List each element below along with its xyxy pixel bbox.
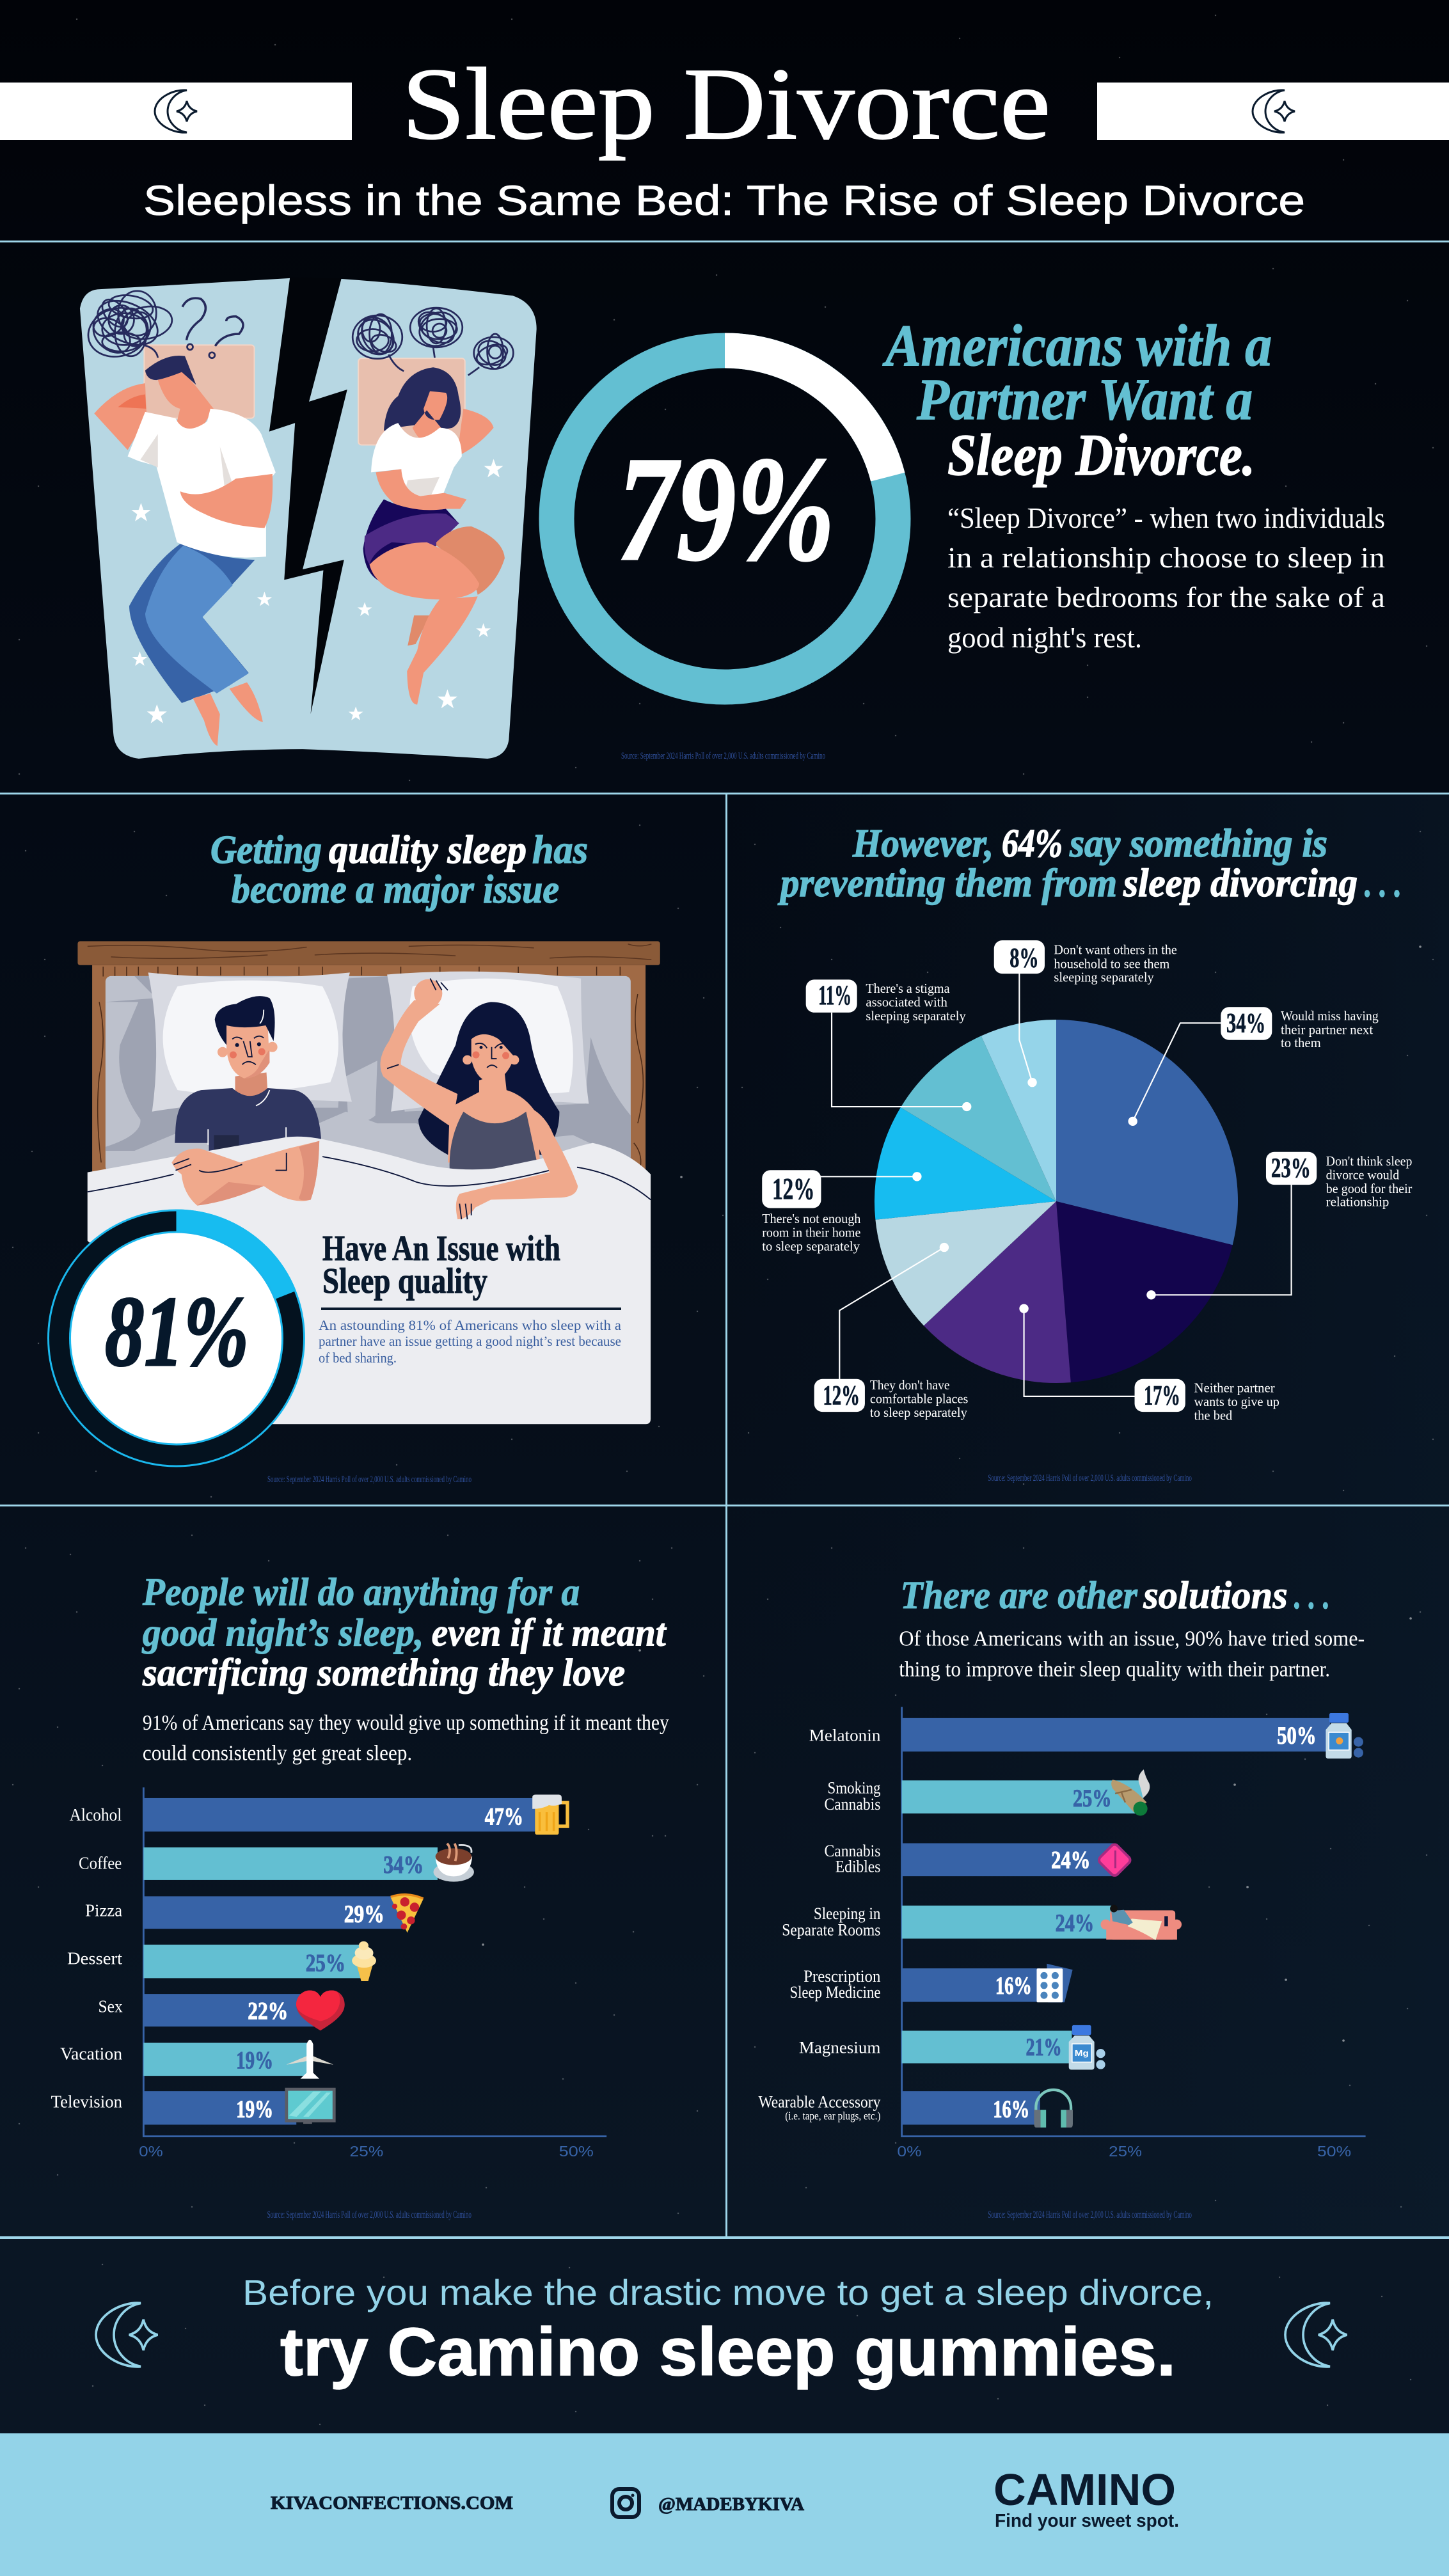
callout 12% not enough room: There's not enough — [762, 1212, 861, 1226]
callout 11% — [806, 979, 971, 1111]
callout 12% comfortable places: They don't have — [870, 1378, 950, 1393]
source note: Source: September 2024 Harris Poll of over 2,000 U.S. adults commissioned by Camino — [621, 751, 825, 761]
source note: Source: September 2024 Harris Poll of over 2,000 U.S. adults commissioned by Camino — [988, 1473, 1192, 1483]
dividers — [0, 241, 1449, 2239]
callout 34%: their partner next — [1281, 1023, 1373, 1037]
heading: preventing them from — [777, 862, 1117, 905]
axis ticks: 25% — [1109, 2143, 1142, 2160]
callout 11%: sleeping separately — [866, 1009, 966, 1023]
callout 12% comfortable places — [814, 1243, 968, 1420]
callout 17% — [1019, 1304, 1279, 1423]
icon: beer — [532, 1794, 567, 1835]
icon: prescription blister pack — [1036, 1964, 1073, 2002]
callout 17%: the bed — [1194, 1408, 1233, 1423]
axis ticks: 0% — [139, 2143, 163, 2160]
value labels: 34% — [383, 1851, 424, 1879]
woman in bed — [380, 979, 559, 1173]
callout 12% comfortable places: comfortable places — [870, 1392, 968, 1407]
callout text — [319, 1317, 621, 1366]
callout 12% not enough room: 12% — [772, 1173, 814, 1206]
callout heading — [322, 1229, 560, 1301]
heading — [777, 822, 1402, 905]
callout 17%: 17% — [1144, 1381, 1180, 1411]
panel: quality sleep issue — [49, 828, 660, 1485]
value labels: 50% — [1277, 1722, 1316, 1750]
icon: heart — [296, 1990, 345, 2030]
intro text: thing to improve their sleep quality with their partner. — [899, 1657, 1330, 1681]
callout 12% comfortable places: 12% — [823, 1381, 860, 1411]
category labels: Magnesium — [799, 2037, 881, 2057]
callout 23%: 23% — [1271, 1153, 1311, 1183]
food and item icons — [287, 1794, 567, 2124]
category labels: Sex — [98, 1996, 123, 2016]
cta line one: Before you make the drastic move to get a sleep divorce, — [242, 2272, 1214, 2312]
axis ticks — [897, 2143, 1351, 2160]
heading: sacrificing something they love — [142, 1652, 625, 1695]
value labels: 21% — [1025, 2034, 1062, 2061]
callout text: An astounding 81% of Americans who sleep with a — [319, 1317, 621, 1333]
logo: camino: CAMINO — [994, 2465, 1176, 2515]
woman sleeping — [358, 358, 505, 704]
icon: cannabis joint — [1111, 1769, 1150, 1816]
value labels: 24% — [1056, 1909, 1094, 1937]
value labels: 19% — [236, 2096, 273, 2123]
axis ticks: 25% — [349, 2143, 383, 2160]
heading: has — [532, 828, 588, 872]
callout 23%: be good for their — [1326, 1181, 1412, 1196]
callout 23%: relationship — [1326, 1195, 1389, 1210]
logo: camino: Find your sweet spot. — [995, 2511, 1179, 2531]
callout 12% not enough room: room in their home — [762, 1226, 860, 1240]
callout 8%: household to see them — [1054, 957, 1169, 972]
category labels: Pizza — [85, 1900, 122, 1920]
value labels: 19% — [236, 2046, 273, 2074]
icon: instagram — [612, 2489, 639, 2517]
man sleeping — [94, 345, 276, 746]
category labels — [51, 1805, 123, 2112]
heading: Partner Want a — [916, 367, 1253, 432]
category labels: Prescription — [804, 1966, 880, 1986]
heading: quality sleep — [329, 828, 527, 872]
heading: even if it meant — [432, 1611, 667, 1654]
value labels: 16% — [995, 1972, 1032, 2000]
heading — [141, 1571, 667, 1695]
icon: ice cream — [352, 1941, 376, 1981]
heading: Getting — [210, 828, 322, 872]
callout heading: Have An Issue with — [322, 1229, 560, 1268]
intro text: could consistently get great sleep. — [143, 1741, 412, 1765]
value labels: 29% — [344, 1900, 384, 1928]
category labels: Smoking — [828, 1778, 880, 1798]
banner bar left — [0, 83, 352, 140]
category labels: Television — [51, 2092, 122, 2112]
icon: headphones — [1034, 2090, 1073, 2128]
heading: good night’s sleep, — [141, 1611, 424, 1654]
callout 23%: divorce would — [1326, 1168, 1400, 1183]
icon: moon right — [1285, 2303, 1347, 2367]
pie chart — [875, 1020, 1238, 1383]
icon: magnesium bottle — [1069, 2025, 1105, 2069]
callout 12% comfortable places: to sleep separately — [870, 1405, 968, 1420]
bars — [902, 1718, 1330, 2124]
crossed arms — [171, 1141, 319, 1206]
callout 23%: Don't think sleep — [1326, 1154, 1412, 1169]
callout 34%: 34% — [1226, 1009, 1265, 1039]
category labels: Cannabis — [825, 1794, 880, 1813]
panel: what people would give up — [51, 1571, 669, 2220]
heading — [900, 1574, 1330, 1617]
subtitle: Sleepless in the Same Bed: The Rise of Sleep Divorce — [143, 177, 1305, 224]
panel: 79% americans want a sleep divorce — [80, 278, 1385, 761]
category labels: Sleep Medicine — [789, 1982, 880, 2002]
category labels: Melatonin — [809, 1725, 880, 1744]
category labels: Alcohol — [70, 1805, 122, 1824]
callout 34% — [1128, 1007, 1379, 1126]
callout 34%: Would miss having — [1281, 1009, 1379, 1023]
heading: . . . — [1365, 862, 1402, 905]
category labels: Separate Rooms — [782, 1920, 880, 1940]
callout heading: Sleep quality — [322, 1261, 487, 1301]
axis ticks: 50% — [1317, 2143, 1351, 2160]
callout 11%: There's a stigma — [866, 981, 950, 996]
heading — [882, 313, 1272, 487]
heading: sleep divorcing — [1123, 862, 1358, 905]
header — [0, 47, 1449, 224]
callout 23% — [1146, 1152, 1412, 1299]
icon: moon and star right — [1253, 90, 1295, 132]
value labels — [236, 1803, 523, 2123]
bars — [143, 1798, 536, 2124]
heading — [210, 828, 588, 912]
icon: edible gummy — [1097, 1843, 1132, 1877]
definition text — [947, 502, 1385, 654]
category labels: Dessert — [67, 1948, 122, 1968]
callout 8% — [994, 940, 1177, 1087]
title: Sleep Divorce — [402, 47, 1050, 161]
callout 12% not enough room — [762, 1170, 922, 1254]
icon: pizza — [391, 1894, 424, 1932]
source note: Source: September 2024 Harris Poll of over 2,000 U.S. adults commissioned by Camino — [988, 2209, 1192, 2220]
bar chart — [758, 1707, 1366, 2160]
value labels: 25% — [306, 1949, 345, 1977]
website: KIVACONFECTIONS.COM — [271, 2493, 513, 2513]
donut chart 81% — [49, 1210, 305, 1466]
callout 8%: sleeping separately — [1054, 970, 1154, 984]
axis ticks: 0% — [897, 2143, 922, 2160]
heading: 64% — [1002, 822, 1063, 865]
icon: magnesium bottle: Mg — [1075, 2049, 1089, 2058]
value labels: 24% — [1051, 1847, 1090, 1874]
heading: solutions — [1143, 1574, 1288, 1617]
definition text: good night's rest. — [947, 621, 1142, 654]
callout text: of bed sharing. — [319, 1350, 397, 1366]
value labels: 16% — [993, 2096, 1029, 2123]
donut chart 79% — [557, 351, 893, 687]
value labels: 25% — [1073, 1785, 1112, 1812]
intro text: Of those Americans with an issue, 90% have tried some- — [899, 1627, 1365, 1650]
category labels: Vacation — [60, 2044, 122, 2064]
heading: People will do anything for a — [142, 1571, 580, 1614]
value labels: 22% — [248, 1997, 288, 2025]
source note: Source: September 2024 Harris Poll of over 2,000 U.S. adults commissioned by Camino — [267, 1474, 471, 1485]
cta line two: try Camino sleep gummies. — [280, 2314, 1176, 2390]
definition text: in a relationship choose to sleep in — [947, 541, 1385, 574]
callout 34%: to them — [1281, 1036, 1321, 1050]
category labels: Sleeping in — [814, 1904, 880, 1923]
panel: call to action — [96, 2272, 1347, 2390]
banner bar right — [1097, 83, 1449, 140]
icon: moon and star left — [155, 90, 197, 132]
heading: Sleep Divorce. — [947, 422, 1255, 487]
woman's arm over blanket — [456, 1108, 578, 1219]
heading: There are other — [900, 1574, 1138, 1617]
bar chart — [51, 1787, 606, 2160]
callout 11%: associated with — [866, 995, 948, 1010]
man in bed — [175, 996, 321, 1162]
footer band — [0, 2433, 1449, 2576]
category labels — [758, 1725, 881, 2122]
category labels: Wearable Accessory — [758, 2092, 881, 2112]
intro text: 91% of Americans say they would give up something if it meant they — [143, 1711, 669, 1735]
category labels: (i.e. tape, ear plugs, etc.) — [785, 2110, 881, 2122]
scribbles and question marks — [83, 291, 513, 375]
heading: say something is — [1069, 822, 1327, 865]
icon: airplane — [287, 2040, 333, 2079]
heading: become a major issue — [232, 868, 559, 912]
definition text: “Sleep Divorce” - when two individuals — [947, 502, 1385, 534]
definition text: separate bedrooms for the sake of a — [947, 581, 1385, 613]
icon: melatonin bottle — [1326, 1713, 1363, 1758]
callout 11%: 11% — [818, 981, 851, 1011]
icon: person on sofa — [1101, 1905, 1182, 1940]
heading: . . . — [1294, 1574, 1330, 1617]
category labels: Coffee — [79, 1853, 122, 1872]
big number: 79% — [617, 425, 835, 592]
callout text: partner have an issue getting a good night’s rest because — [319, 1333, 621, 1349]
value labels — [993, 1722, 1316, 2123]
intro text — [143, 1711, 669, 1765]
illustration: couple in bed — [77, 941, 660, 1424]
category labels: Edibles — [835, 1856, 880, 1876]
icon: coffee — [434, 1844, 474, 1882]
category labels: Cannabis — [825, 1841, 880, 1860]
heading: However, — [852, 822, 994, 865]
big number: 81% — [105, 1276, 249, 1387]
callout 17%: wants to give up — [1194, 1395, 1279, 1409]
callout 8%: Don't want others in the — [1054, 943, 1177, 957]
illustration: couple split by lightning — [80, 278, 537, 759]
remedy icons — [1036, 1713, 1363, 2069]
blanket — [88, 1137, 651, 1424]
icon: television — [287, 2089, 334, 2124]
pie callouts — [762, 940, 1412, 1483]
axis ticks — [139, 2143, 594, 2160]
callout 17%: Neither partner — [1194, 1381, 1275, 1395]
callout 12% not enough room: to sleep separately — [762, 1239, 860, 1254]
panel: other solutions — [758, 1574, 1366, 2220]
handle: @MADEBYKIVA — [658, 2495, 805, 2515]
heading: Americans with a — [882, 313, 1272, 378]
icon: moon left — [96, 2303, 158, 2367]
panel: 64% prevented from sleep divorcing — [762, 822, 1412, 1483]
value labels: 47% — [485, 1803, 523, 1830]
callout 8%: 8% — [1010, 944, 1039, 973]
source note: Source: September 2024 Harris Poll of over 2,000 U.S. adults commissioned by Camino — [267, 2209, 471, 2220]
intro text — [899, 1627, 1365, 1681]
axis ticks: 50% — [559, 2143, 594, 2160]
